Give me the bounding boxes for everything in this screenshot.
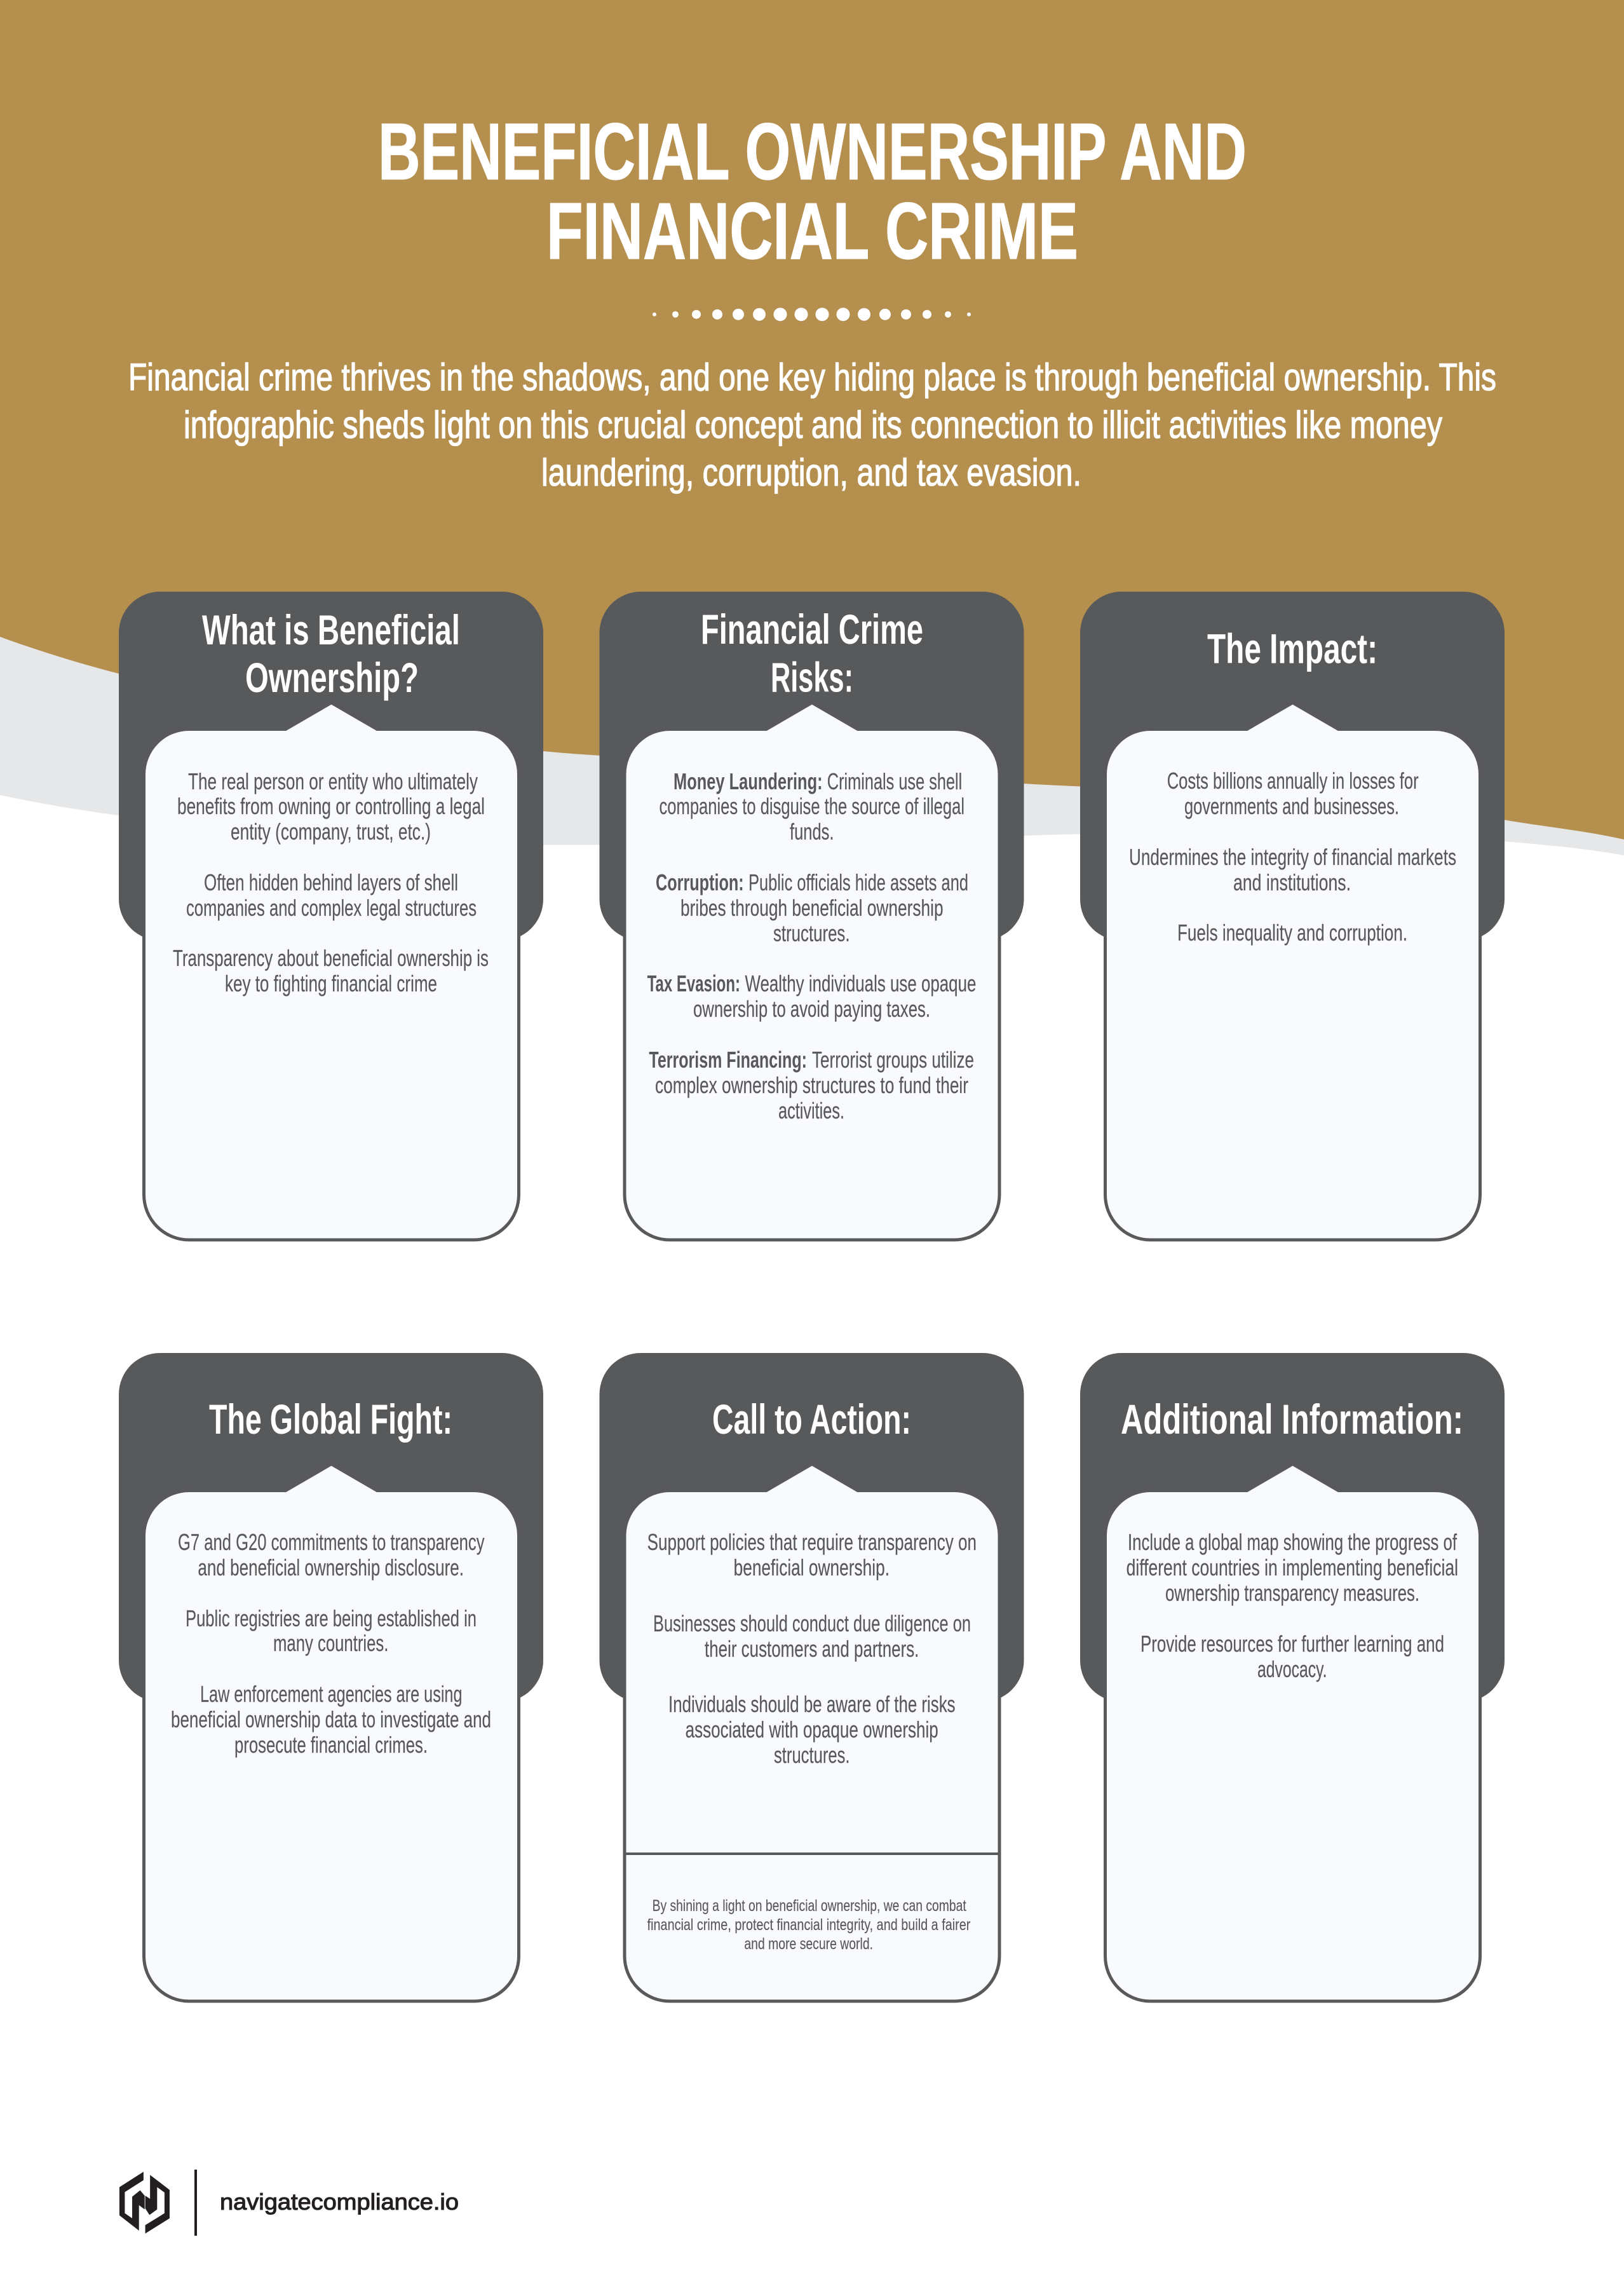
body text bbox=[173, 768, 489, 996]
body text bbox=[647, 768, 976, 1124]
heading: Risks: bbox=[771, 653, 853, 700]
body text: Public officials hide assets and bbox=[748, 869, 968, 895]
header box bbox=[119, 1353, 543, 1702]
body text: ownership to avoid paying taxes. bbox=[693, 996, 930, 1022]
footer logo bbox=[119, 2170, 459, 2236]
body text: Costs billions annually in losses for bbox=[1167, 768, 1419, 794]
heading: The Global Fight: bbox=[209, 1396, 452, 1443]
body text: Wealthy individuals use opaque bbox=[745, 970, 976, 996]
body text: beneficial ownership. bbox=[734, 1554, 890, 1580]
body text: their customers and partners. bbox=[705, 1636, 919, 1662]
panel: What is Beneficial Ownership? bbox=[119, 592, 543, 1240]
body text: beneficial ownership data to investigate and bbox=[171, 1706, 491, 1732]
website text: navigatecompliance.io bbox=[220, 2189, 459, 2215]
heading: Ownership? bbox=[245, 654, 419, 701]
body text: Fuels inequality and corruption. bbox=[1177, 920, 1407, 946]
heading: The Impact: bbox=[1207, 625, 1377, 672]
body text: Terrorism Financing: bbox=[649, 1047, 807, 1073]
closing statement: financial crime, protect financial integrity, and build a fairer bbox=[647, 1916, 970, 1934]
heading: Call to Action: bbox=[712, 1396, 911, 1443]
body text: key to fighting financial crime bbox=[225, 970, 437, 996]
dotted divider bbox=[653, 308, 971, 321]
body text: Tax Evasion: bbox=[647, 970, 740, 996]
body text: associated with opaque ownership bbox=[686, 1716, 938, 1743]
panel: Call to Action bbox=[600, 1353, 1024, 2001]
closing statement bbox=[647, 1897, 970, 1953]
panel: The Global Fight bbox=[119, 1353, 543, 2001]
heading bbox=[701, 606, 923, 700]
body text: The real person or entity who ultimately bbox=[188, 768, 478, 794]
title bbox=[378, 107, 1247, 276]
intro text: laundering, corruption, and tax evasion. bbox=[541, 451, 1081, 494]
content card bbox=[1106, 1464, 1480, 2001]
body text: Individuals should be aware of the risks bbox=[668, 1691, 956, 1717]
body text: prosecute financial crimes. bbox=[234, 1732, 428, 1758]
body text: advocacy. bbox=[1257, 1656, 1327, 1682]
body text: activities. bbox=[778, 1098, 844, 1124]
panel: Additional Information bbox=[1080, 1353, 1505, 2001]
body text: Include a global map showing the progress of bbox=[1128, 1529, 1458, 1555]
body text: complex ownership structures to fund their bbox=[655, 1072, 968, 1098]
body text bbox=[171, 1529, 491, 1758]
body text: Public registries are being established in bbox=[186, 1605, 477, 1631]
closing statement: and more secure world. bbox=[744, 1935, 873, 1953]
body text bbox=[1129, 768, 1456, 946]
header box bbox=[600, 592, 1024, 941]
body text: Support policies that require transparency on bbox=[647, 1529, 977, 1555]
body text: Corruption: bbox=[656, 869, 744, 895]
intro text bbox=[128, 356, 1496, 494]
header box bbox=[600, 1353, 1024, 1702]
body text: Transparency about beneficial ownership is bbox=[173, 945, 489, 971]
body text: structures. bbox=[773, 920, 850, 946]
content card bbox=[1106, 703, 1480, 1240]
title: BENEFICIAL OWNERSHIP AND bbox=[378, 107, 1247, 196]
icon: hexagonal N mark bbox=[119, 2172, 170, 2234]
body text bbox=[1127, 1529, 1458, 1682]
body text: and institutions. bbox=[1233, 869, 1351, 895]
content card bbox=[625, 703, 999, 1240]
body text bbox=[647, 1529, 977, 1768]
heading: Additional Information: bbox=[1121, 1396, 1463, 1443]
body text: governments and businesses. bbox=[1184, 793, 1399, 819]
header box bbox=[1080, 592, 1505, 941]
header box bbox=[119, 592, 543, 941]
heading: Financial Crime bbox=[701, 606, 923, 653]
body text: Law enforcement agencies are using bbox=[200, 1681, 463, 1707]
body text: structures. bbox=[774, 1742, 850, 1768]
heading bbox=[202, 606, 460, 701]
closing statement: By shining a light on beneficial ownership, we can combat bbox=[653, 1897, 966, 1915]
body text: Provide resources for further learning and bbox=[1140, 1631, 1444, 1657]
content card bbox=[625, 1464, 999, 2001]
body text: companies and complex legal structures bbox=[186, 895, 477, 921]
title: FINANCIAL CRIME bbox=[546, 186, 1078, 276]
heading: What is Beneficial bbox=[202, 606, 460, 653]
body text: Money Laundering: bbox=[673, 768, 823, 794]
body text: G7 and G20 commitments to transparency bbox=[178, 1529, 484, 1555]
panel: Financial Crime Risks bbox=[600, 592, 1024, 1240]
background: grey wave bbox=[0, 572, 1624, 855]
body text: Often hidden behind layers of shell bbox=[204, 869, 458, 895]
body text: and beneficial ownership disclosure. bbox=[198, 1554, 464, 1580]
body text: many countries. bbox=[273, 1630, 388, 1656]
body text: benefits from owning or controlling a legal bbox=[177, 793, 485, 819]
body text: entity (company, trust, etc.) bbox=[231, 819, 431, 845]
header box bbox=[1080, 1353, 1505, 1702]
body text: companies to disguise the source of illegal bbox=[660, 793, 964, 819]
content card bbox=[144, 1464, 518, 2001]
body text: funds. bbox=[790, 819, 834, 845]
background: gold header band bbox=[0, 0, 1624, 839]
body text: ownership transparency measures. bbox=[1165, 1580, 1419, 1606]
body text: bribes through beneficial ownership bbox=[680, 895, 944, 921]
body text: different countries in implementing beneficial bbox=[1127, 1554, 1458, 1580]
body text: Businesses should conduct due diligence on bbox=[653, 1610, 971, 1636]
body text: Terrorist groups utilize bbox=[812, 1047, 974, 1073]
body text: Undermines the integrity of financial markets bbox=[1129, 844, 1456, 870]
content card bbox=[144, 703, 518, 1240]
body text: Criminals use shell bbox=[827, 768, 962, 794]
panel: The Impact bbox=[1080, 592, 1505, 1240]
